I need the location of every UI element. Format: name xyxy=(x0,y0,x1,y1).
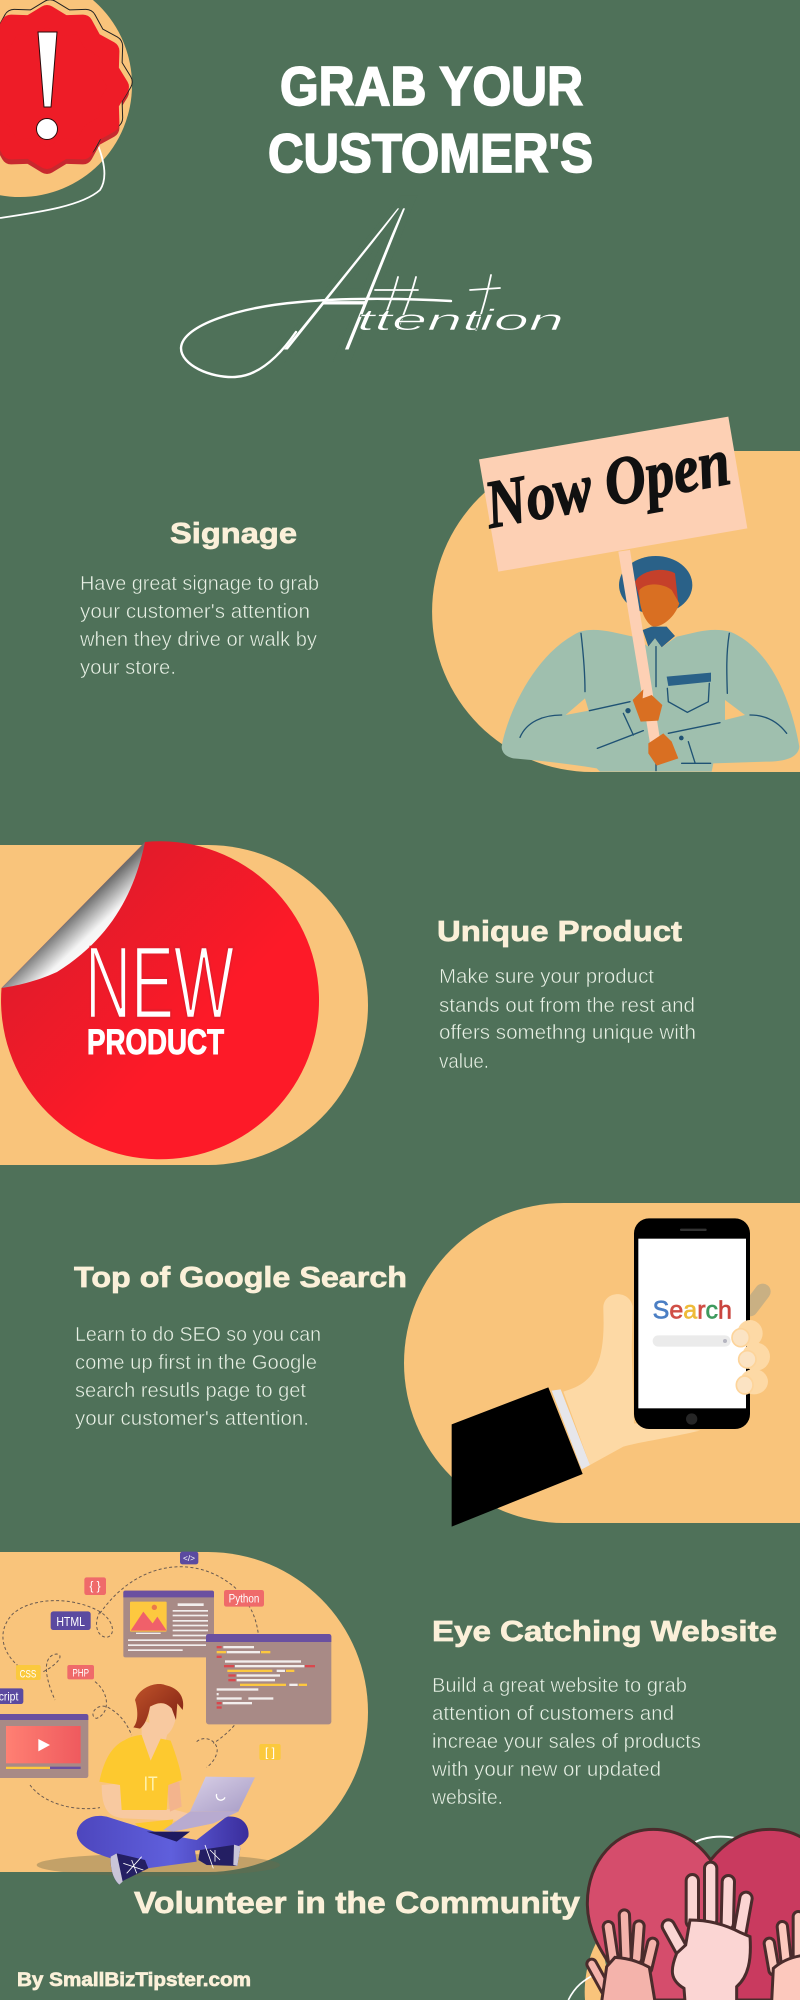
body text: Have great signage to grab xyxy=(80,573,319,595)
body text: Learn to do SEO so you can xyxy=(75,1324,321,1346)
body text: your store. xyxy=(80,657,176,679)
heading: Unique Product xyxy=(437,916,682,948)
illustration: hands and heart xyxy=(568,1829,800,2000)
icon: new product sticker: PRODUCT xyxy=(87,1023,224,1062)
body text: offers somethng unique with xyxy=(439,1022,696,1044)
panel: signage xyxy=(79,417,800,772)
illustration blob xyxy=(404,1203,800,1523)
tag: braces: { } xyxy=(89,1579,101,1593)
body text: attention of customers and xyxy=(432,1703,674,1725)
body text: search resutls page to get xyxy=(75,1380,306,1402)
body text xyxy=(75,1324,321,1430)
body text: increae your sales of products xyxy=(432,1731,701,1753)
tag: php: PHP xyxy=(72,1668,89,1680)
tag: html xyxy=(51,1611,91,1630)
title: grab your customer's xyxy=(268,55,593,184)
panel: volunteer in the community xyxy=(134,1829,800,2000)
body text: your customer's attention xyxy=(80,601,310,623)
body text: your customer's attention. xyxy=(75,1408,309,1430)
icon: red warning badge xyxy=(0,10,122,164)
tag: brackets: [ ] xyxy=(265,1746,275,1760)
body text xyxy=(79,573,319,679)
illustration blob xyxy=(0,1552,368,1872)
title: attention script: ttention xyxy=(357,304,564,337)
left hand xyxy=(592,1915,653,1990)
panel: top of google search xyxy=(74,1203,800,1527)
window: code editor xyxy=(206,1634,331,1724)
sign text: Now Open xyxy=(478,423,736,543)
orange blob behind badge xyxy=(0,0,132,197)
title: attention script xyxy=(181,153,564,404)
ascender strokes xyxy=(375,275,500,330)
panel: unique product xyxy=(0,841,696,1165)
right hand xyxy=(769,1917,798,1970)
tag: php xyxy=(67,1665,94,1680)
tag: html: HTML xyxy=(56,1615,85,1629)
illustration blob xyxy=(432,451,800,772)
tag: code: </> xyxy=(183,1553,195,1563)
body text: come up first in the Google xyxy=(75,1352,317,1374)
tag: python: Python xyxy=(229,1592,259,1606)
icon: new product sticker xyxy=(1,841,319,1159)
heading: Volunteer in the Community xyxy=(134,1885,581,1920)
body text: value. xyxy=(439,1051,489,1073)
illustration: hand holding phone: Search xyxy=(653,1296,732,1324)
center hand xyxy=(668,1868,746,1967)
illustration: man holding now open sign xyxy=(479,417,799,772)
tag: brackets xyxy=(259,1744,281,1760)
initial letter: A xyxy=(246,153,472,404)
body text: when they drive or walk by xyxy=(79,629,317,651)
body text xyxy=(431,1675,701,1809)
swash loop of the initial xyxy=(181,299,451,377)
figure: developer xyxy=(77,1684,255,1885)
icon: new product sticker: NEW xyxy=(85,925,234,1040)
body text xyxy=(439,966,696,1073)
tag: braces xyxy=(84,1577,106,1595)
figure: developer: IT xyxy=(144,1773,158,1796)
alert badge with blob and curve xyxy=(0,0,132,218)
tag: css xyxy=(16,1665,41,1680)
tag: code xyxy=(180,1552,198,1564)
white curve xyxy=(0,143,104,218)
heading: Top of Google Search xyxy=(74,1262,407,1294)
tag: css: CSS xyxy=(20,1668,36,1680)
body text: Make sure your product xyxy=(439,966,654,988)
illustration: developer with laptop xyxy=(0,1552,331,1885)
heading: Signage xyxy=(170,518,297,550)
title: grab your customer's: CUSTOMER'S xyxy=(268,122,593,184)
body text: stands out from the rest and xyxy=(439,995,695,1017)
panel: eye catching website xyxy=(0,1552,777,1885)
footer credit: By SmallBizTipster.com xyxy=(17,1970,251,1991)
body text: website. xyxy=(431,1787,503,1809)
title: grab your customer's: GRAB YOUR xyxy=(280,55,583,117)
window: image and text xyxy=(123,1591,214,1657)
body text: Build a great website to grab xyxy=(432,1675,687,1697)
body text: with your new or updated xyxy=(431,1759,661,1781)
illustration blob xyxy=(0,845,368,1165)
window: video player xyxy=(0,1714,88,1778)
illustration: hand holding phone xyxy=(452,1218,770,1527)
heading: Eye Catching Website xyxy=(432,1616,777,1648)
